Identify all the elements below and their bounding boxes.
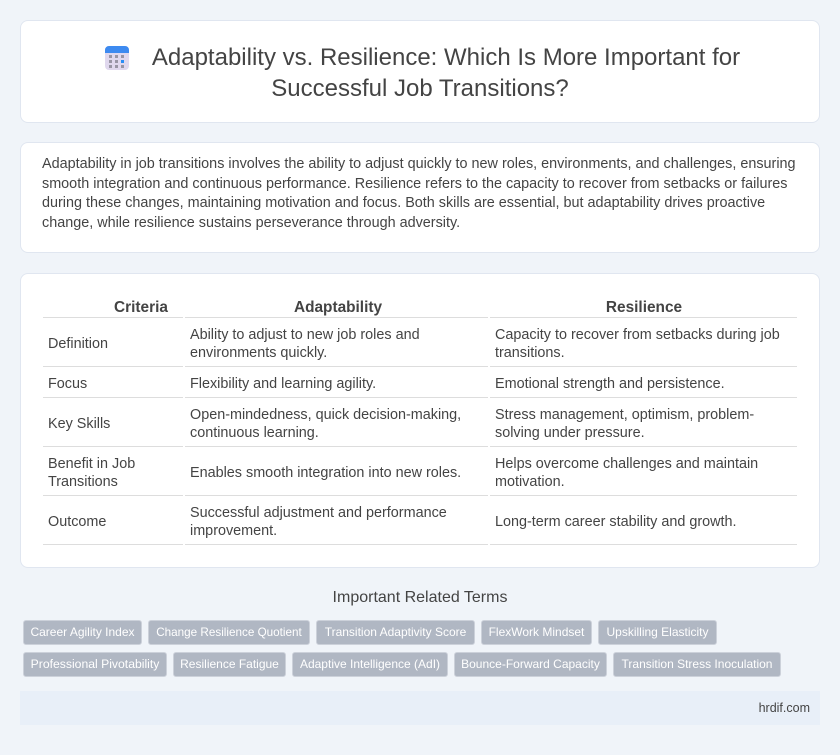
tags: related terms: FlexWork Mindset xyxy=(489,625,584,639)
row: definition: Definition xyxy=(48,336,108,352)
row: outcome: improvement. xyxy=(190,523,277,539)
row: key skills: continuous learning. xyxy=(190,425,319,441)
row: definition: environments quickly. xyxy=(190,345,327,361)
row: definition: Capacity to recover from setbacks during job xyxy=(495,327,780,343)
text block: introduction: Adaptability in job transitions involves the ability to adjust quickly to new roles, environments, and challenges, ensuring xyxy=(42,156,796,172)
text block: introduction: smooth integration and continuous performance. Resilience refers to the capacity to recover from setbacks or failures xyxy=(42,176,787,192)
row: definition xyxy=(48,327,780,361)
heading: important related terms: Important Related Terms xyxy=(333,589,507,606)
row: focus: Emotional strength and persistence. xyxy=(495,376,725,392)
tags: related terms: Transition Stress Inoculation xyxy=(622,657,772,671)
tags: related terms: Resilience Fatigue xyxy=(180,657,279,671)
row: benefit in job transitions: motivation. xyxy=(495,474,565,490)
table header: Criteria xyxy=(114,299,168,316)
tags: related terms: Adaptive Intelligence (AdI) xyxy=(300,657,440,671)
tags: related terms: Change Resilience Quotient xyxy=(156,626,302,639)
row: definition: Ability to adjust to new job roles and xyxy=(190,327,420,343)
panel: comparison table xyxy=(20,273,820,568)
row: definition: transitions. xyxy=(495,345,565,361)
text block: introduction: during these changes, maintaining motivation and focus. Both skills are essential, but adaptability drives proactive xyxy=(42,195,765,211)
icon: calendar xyxy=(105,46,129,70)
panel: title card xyxy=(20,20,820,123)
row: benefit in job transitions: Benefit in Job xyxy=(48,456,135,472)
table header: Adaptability xyxy=(294,299,382,316)
table header xyxy=(114,299,682,316)
row: outcome xyxy=(48,505,737,539)
row: key skills: Key Skills xyxy=(48,416,110,432)
row: focus: Focus xyxy=(48,376,87,392)
row: outcome: Successful adjustment and performance xyxy=(190,505,447,521)
row: key skills: solving under pressure. xyxy=(495,425,645,441)
row: key skills: Stress management, optimism, problem- xyxy=(495,407,754,423)
row: outcome: Outcome xyxy=(48,514,106,530)
title xyxy=(152,44,740,102)
row: benefit in job transitions: Transitions xyxy=(48,474,118,490)
row: focus xyxy=(48,376,725,392)
tags: related terms: Upskilling Elasticity xyxy=(606,625,709,639)
row: benefit in job transitions: Enables smooth integration into new roles. xyxy=(190,465,461,481)
tags: related terms: Bounce-Forward Capacity xyxy=(461,657,600,671)
text block: introduction xyxy=(42,156,796,230)
row: key skills xyxy=(48,407,754,441)
tags: related terms: Transition Adaptivity Score xyxy=(325,625,466,639)
title: Successful Job Transitions? xyxy=(271,75,569,102)
tags: related terms xyxy=(23,620,781,677)
tags: related terms: Professional Pivotability xyxy=(31,657,159,671)
row: benefit in job transitions: Helps overcome challenges and maintain xyxy=(495,456,758,472)
title: Adaptability vs. Resilience: Which Is More Important for xyxy=(152,44,740,71)
row: benefit in job transitions xyxy=(48,456,758,490)
table header: Resilience xyxy=(606,299,682,316)
row: key skills: Open-mindedness, quick decision-making, xyxy=(190,407,461,423)
panel: introduction xyxy=(20,142,820,253)
tags: related terms: Career Agility Index xyxy=(30,625,135,639)
row: outcome: Long-term career stability and growth. xyxy=(495,514,737,530)
footer text: hrdif.com: hrdif.com xyxy=(759,701,810,715)
text block: introduction: change, while resilience sustains perseverance through adversity. xyxy=(42,214,460,230)
footer xyxy=(20,691,820,725)
row: focus: Flexibility and learning agility. xyxy=(190,376,376,392)
